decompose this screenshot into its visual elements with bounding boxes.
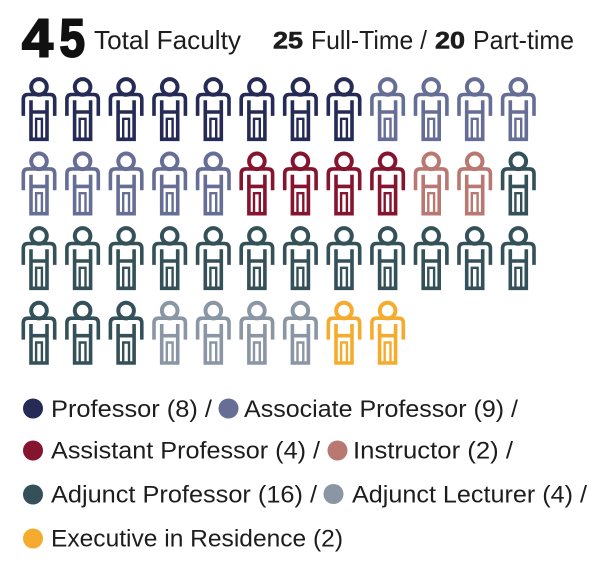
icon: person professor [241,79,273,139]
icon: person adjunct professor [154,228,185,288]
big number 45 [22,8,85,68]
icon: person adjunct lecturer [198,303,229,363]
icon: person instructor [416,154,447,214]
icon: person adjunct professor [503,154,534,214]
legend label: instructor: Instructor (2) / [353,438,513,464]
pictogram row 3: 12 adjunct professors [23,228,534,288]
pictogram row 4: adjunct, adjunct lecturer, executive in residence [23,303,403,363]
icon: person assistant professor [328,154,360,214]
number 20: 20 [435,28,465,55]
icon: person professor [23,79,55,139]
icon: person associate professor [67,154,98,214]
icon: person professor [328,79,360,139]
icon: person associate professor [459,79,490,139]
icon: person professor [110,79,142,139]
icon: person adjunct lecturer [241,303,273,363]
icon: person adjunct lecturer [285,303,316,363]
icon: person executive in residence [328,303,360,363]
legend swatch: assistant professor [23,440,43,460]
legend label: adjunct lecturer: Adjunct Lecturer (4) / [352,482,587,508]
icon: person adjunct professor [67,303,98,363]
icon: person professor [154,79,185,139]
header: faculty totals [22,8,574,68]
icon: person executive in residence [372,303,403,363]
pictogram row 2: associate, assistant, instructor, adjunct [23,154,534,214]
big number 45: 5 [60,8,85,68]
legend swatch: adjunct lecturer [324,484,344,504]
icon: person adjunct lecturer [154,303,185,363]
icon: person assistant professor [372,154,403,214]
icon: person professor [198,79,229,139]
legend label: executive in residence: Executive in Residence (2) [51,526,343,552]
legend label: assistant professor: Assistant Professor (4) / [51,438,320,464]
label: Part-time: Part-time [473,25,574,55]
icon: person professor [285,79,316,139]
icon: person adjunct professor [67,228,98,288]
icon: person assistant professor [285,154,316,214]
legend swatch: adjunct professor [23,484,43,504]
icon: person adjunct professor [110,228,142,288]
legend swatch: executive in residence [23,528,43,548]
legend label: professor: Professor (8) / [51,396,212,423]
legend label: associate professor: Associate Professor (9) / [244,396,518,423]
icon: person associate professor [372,79,403,139]
icon: person associate professor [416,79,447,139]
icon: person adjunct professor [328,228,360,288]
legend [23,396,587,552]
legend swatch: associate professor [218,398,238,418]
icon: person adjunct professor [416,228,447,288]
icon: person associate professor [198,154,229,214]
icon: person professor [67,79,98,139]
icon: person adjunct professor [23,228,55,288]
number 25: 25 [273,28,303,55]
pictogram row 1: 8 professors, 4 associate professors [23,79,534,139]
label: Total Faculty: Total Faculty [94,25,241,55]
icon: person associate professor [154,154,185,214]
icon: person adjunct professor [23,303,55,363]
icon: person adjunct professor [110,303,142,363]
big number 45: 4 [22,8,53,68]
label: Full-Time: Full-Time / [311,25,428,55]
icon: person adjunct professor [372,228,403,288]
icon: person adjunct professor [285,228,316,288]
icon: person adjunct professor [198,228,229,288]
icon: person adjunct professor [503,228,534,288]
icon: person associate professor [503,79,534,139]
icon: person instructor [459,154,490,214]
icon: person associate professor [23,154,55,214]
legend label: adjunct professor: Adjunct Professor (16) / [51,482,317,508]
icon: person adjunct professor [241,228,273,288]
icon: person adjunct professor [459,228,490,288]
legend swatch: instructor [328,440,348,460]
icon: person associate professor [110,154,142,214]
icon: person assistant professor [241,154,273,214]
legend swatch: professor [23,398,43,418]
